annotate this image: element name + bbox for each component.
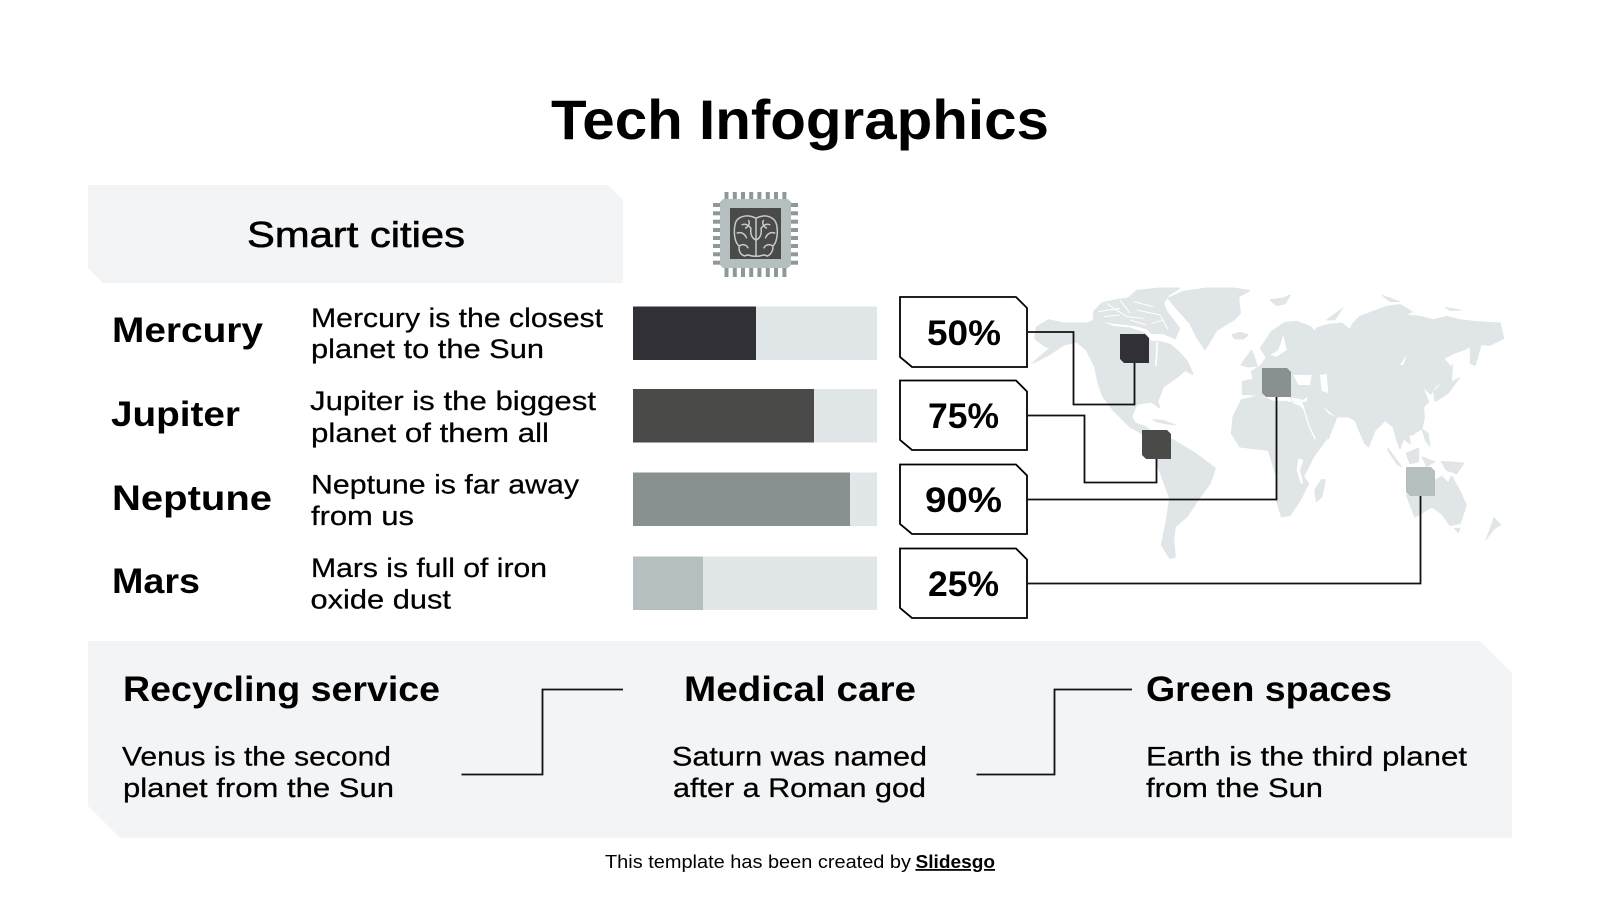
callout: 75%: 75% — [928, 397, 999, 436]
description: Mars: Mars is full of iron — [311, 553, 547, 583]
callout: 90% — [900, 464, 1027, 534]
description: Jupiter: Jupiter is the biggest — [310, 386, 597, 416]
description: Neptune — [311, 470, 580, 531]
label: Mercury: Mercury — [112, 311, 264, 350]
label: Jupiter: Jupiter — [111, 395, 240, 434]
row: Mars — [112, 548, 1027, 618]
description: Mars — [310, 553, 547, 614]
bar: Jupiter 75% — [633, 389, 877, 442]
row: Jupiter — [111, 380, 1027, 450]
service: Recycling service — [122, 670, 440, 803]
description: Mercury: Mercury is the closest — [311, 303, 604, 333]
panel: smart cities header: Smart cities — [247, 214, 465, 255]
map marker: Mercury — [1120, 334, 1149, 363]
label: Mars: Mars — [112, 562, 200, 601]
map marker: Mars — [1406, 467, 1435, 496]
description: Jupiter: planet of them all — [311, 418, 549, 448]
service: Medical care: after a Roman god — [673, 773, 926, 803]
service: Medical care: Saturn was named — [672, 742, 927, 772]
row: Neptune — [112, 464, 1027, 534]
bar: Neptune 90% — [633, 472, 877, 526]
description: Mercury — [311, 303, 604, 364]
panel: services — [88, 641, 1512, 838]
title: Tech Infographics — [551, 88, 1049, 151]
footer credit: This template has been created by — [605, 852, 911, 872]
service: Recycling service: Venus is the second — [122, 742, 391, 772]
connector: medical to green — [976, 690, 1132, 774]
panel: smart cities header — [88, 185, 623, 283]
callout: 25%: 25% — [928, 565, 999, 604]
footer credit: Slidesgo — [916, 852, 995, 872]
callout: 90%: 90% — [925, 481, 1002, 520]
description: Jupiter — [310, 386, 597, 448]
world map — [1033, 288, 1503, 558]
description: Neptune: from us — [311, 501, 414, 531]
service: Recycling service: Recycling service — [123, 670, 440, 709]
row: Mercury — [112, 297, 1027, 367]
callout: 50% — [900, 297, 1027, 367]
service: Green spaces — [1146, 670, 1468, 803]
description: Mars: oxide dust — [310, 584, 452, 614]
description: Mercury: planet to the Sun — [311, 334, 544, 364]
callout: 75% — [900, 380, 1027, 450]
map marker: Neptune — [1262, 368, 1291, 397]
callout: 50%: 50% — [927, 314, 1001, 353]
service: Medical care: Medical care — [684, 670, 916, 709]
service: Green spaces: Green spaces — [1146, 670, 1392, 709]
service: Green spaces: from the Sun — [1146, 773, 1323, 803]
description: Neptune: Neptune is far away — [311, 470, 580, 500]
connector: recycling to medical — [462, 690, 623, 774]
service: Medical care — [672, 670, 927, 803]
service: Green spaces: Earth is the third planet — [1146, 742, 1468, 772]
bar: Mars 25% — [633, 556, 877, 610]
bar: Mercury 50% — [633, 306, 877, 360]
label: Neptune: Neptune — [112, 479, 272, 518]
map marker: Jupiter — [1142, 430, 1171, 459]
callout: 25% — [900, 548, 1027, 618]
connector lines — [1028, 332, 1420, 584]
service: Recycling service: planet from the Sun — [123, 773, 394, 803]
icon: brain chip — [713, 192, 798, 277]
